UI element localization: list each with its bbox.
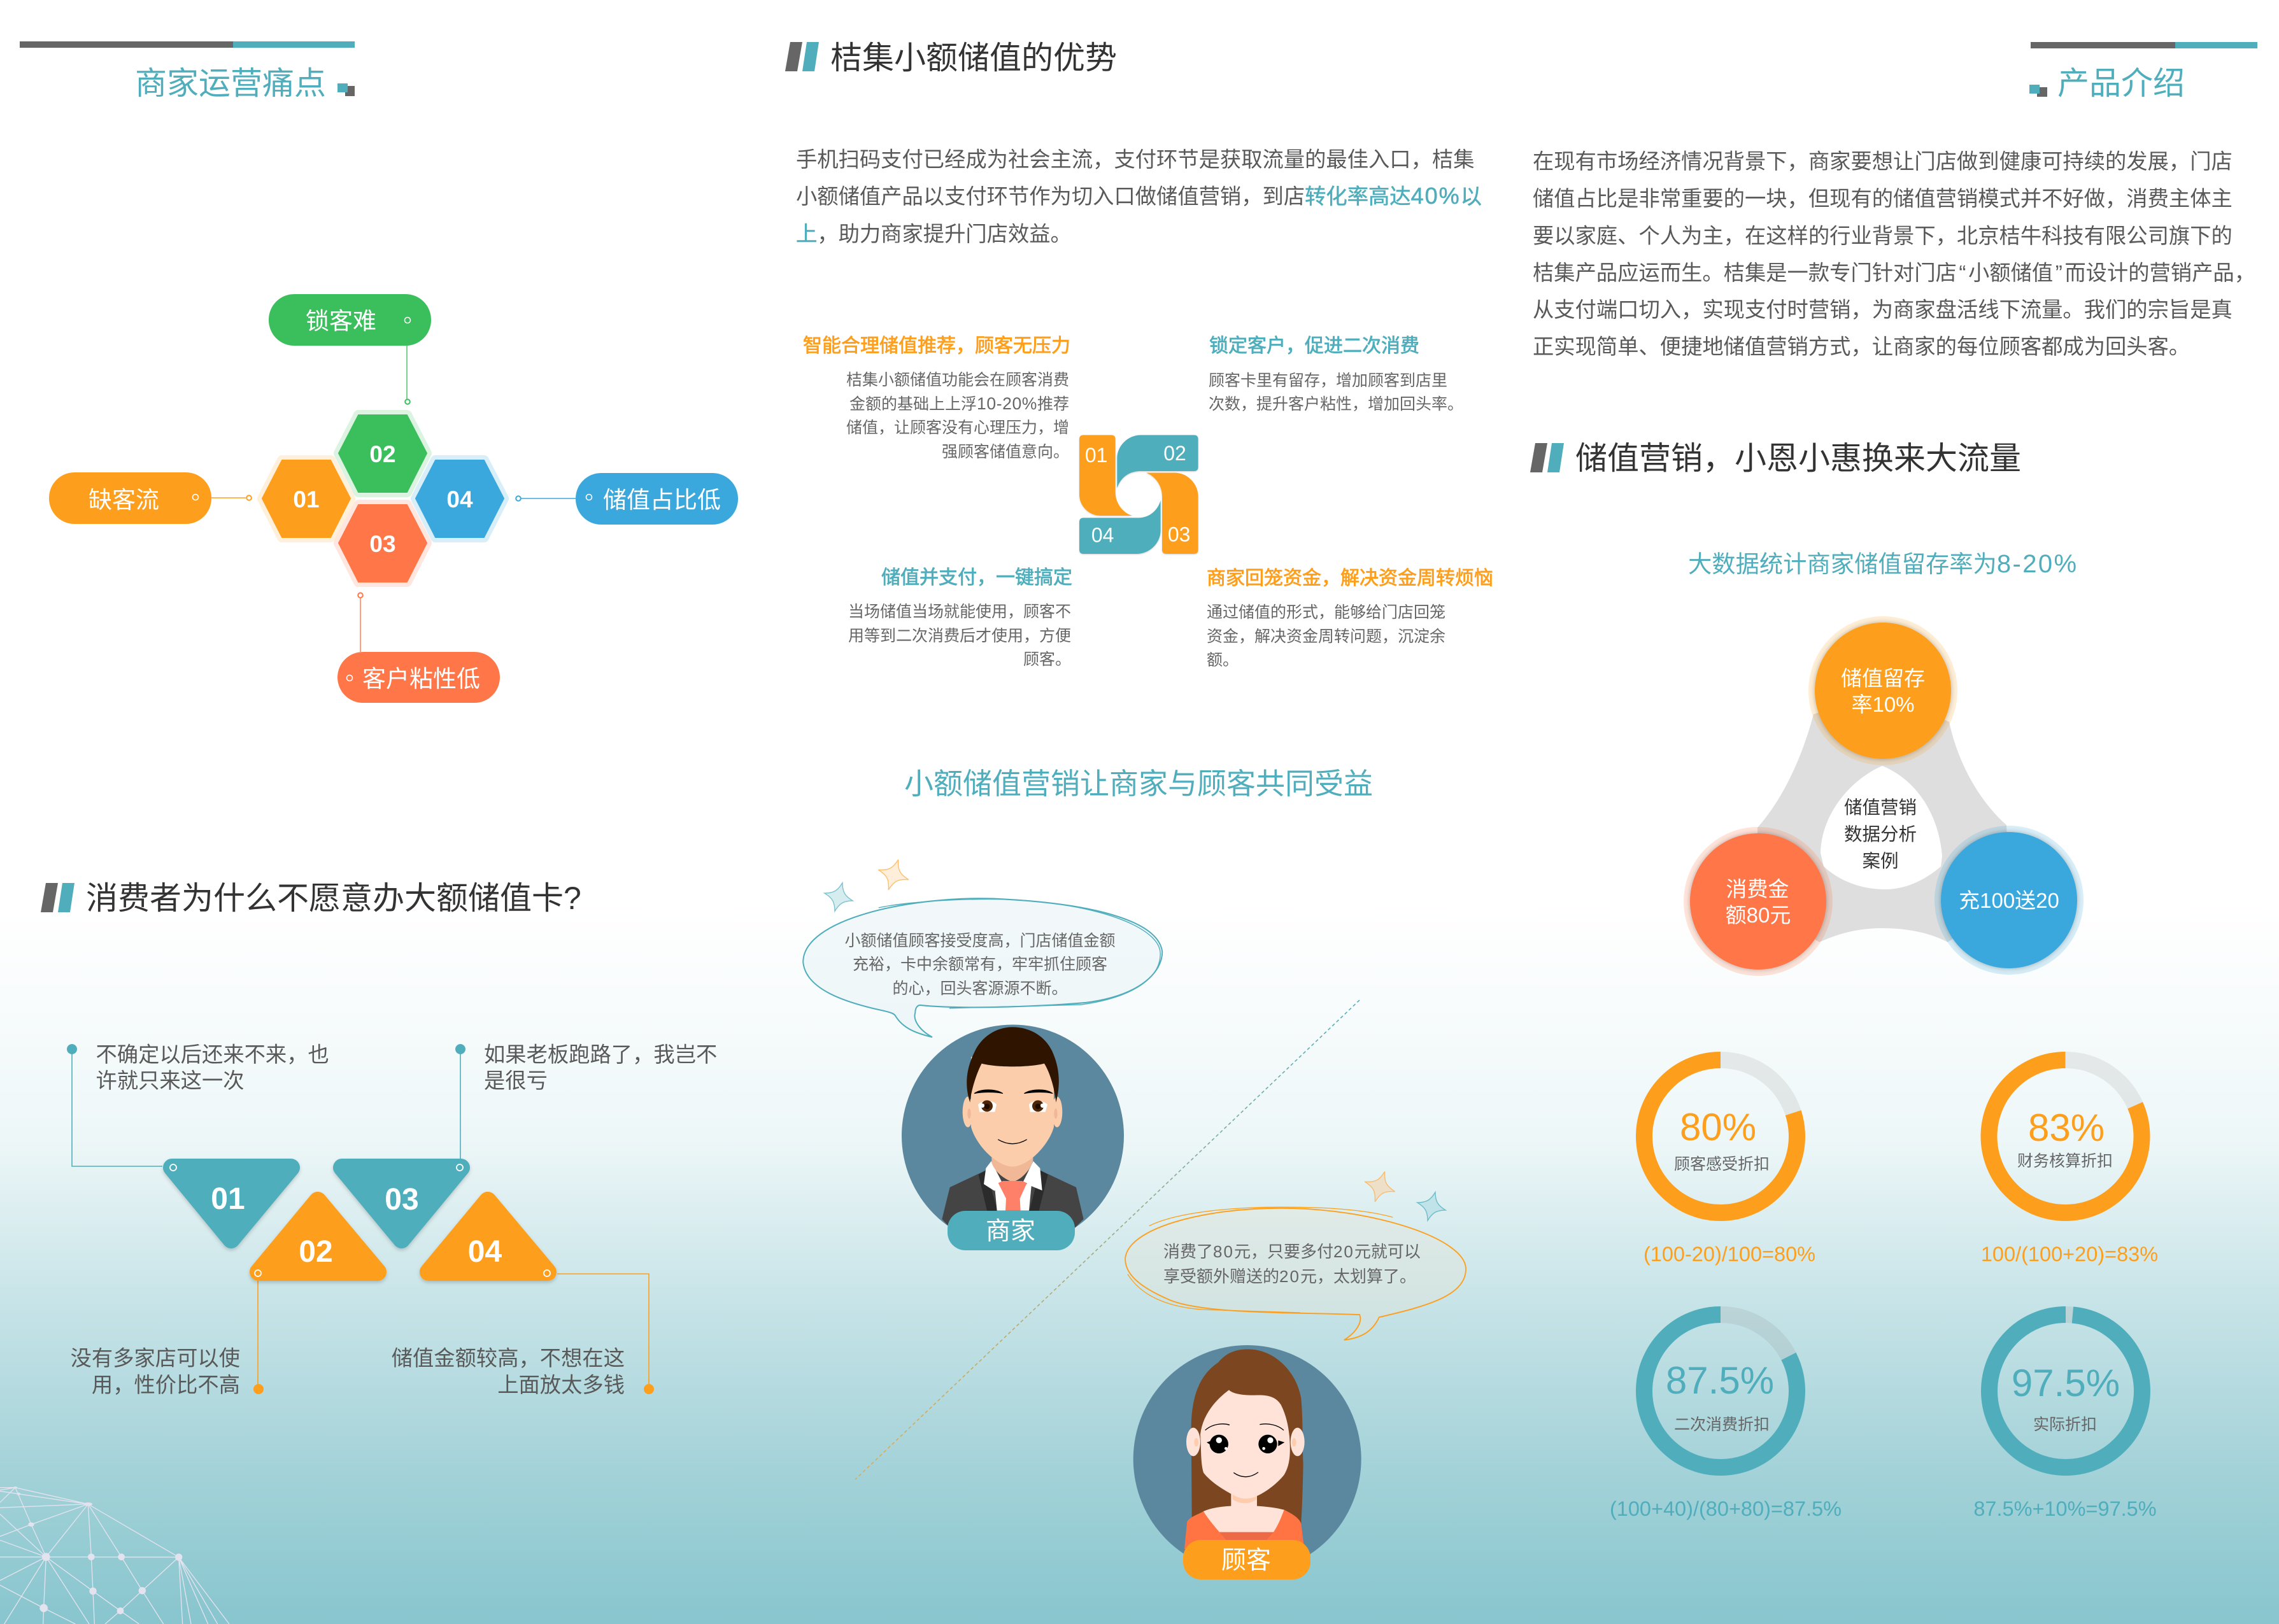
text: center (1844, 798, 1917, 872)
feature 04: pay at once: 当场储值当场就能使用，顾客不 (848, 603, 1071, 621)
formula: 87.5%: (100+40)/(80+80)=87.5% (1610, 1497, 1842, 1520)
star: teal top (821, 879, 856, 915)
donut: 87.5%: 87.5% (1666, 1359, 1774, 1402)
heading: why consumers refuse: 消费者为什么不愿意办大额储值卡? (86, 880, 581, 916)
feature 01: smart recommendation: 储值，让顾客没有心理压力，增 (846, 419, 1069, 437)
triangle 01: 01 (211, 1182, 245, 1216)
formula: 83%: 100/(100+20)=83% (1981, 1243, 2158, 1266)
hexagon 03 (339, 505, 427, 582)
speech bubble: merchant: 充裕，卡中余额常有，牢牢抓住顾客 (853, 956, 1107, 973)
text: center: 案例 (1862, 851, 1899, 872)
text: advantages intro: 手机扫码支付已经成为社会主流，支付环节是获取流量的最佳入口，桔集 (796, 148, 1475, 172)
connector: low stickiness (358, 593, 363, 652)
feature 02: lock customers: 次数，提升客户粘性，增加回头率。 (1209, 395, 1463, 413)
text: product introduction (1533, 150, 2255, 359)
feature 01: smart recommendation: 金额的基础上上浮10-20%推荐 (849, 394, 1069, 413)
hexagon 04: 04 (446, 486, 473, 512)
heading: shared benefit: 小额储值营销让商家与顾客共同受益 (904, 767, 1373, 800)
panel: merchant pain points (20, 41, 738, 703)
pill: 缺客流 (49, 472, 211, 524)
text: reason 01: 许就只来这一次 (96, 1070, 245, 1093)
text: reason 01 (96, 1043, 329, 1093)
feature 01: smart recommendation: 智能合理储值推荐，顾客无压力 (803, 335, 1070, 357)
feature 02: lock customers: 锁定客户，促进二次消费 (1209, 335, 1419, 357)
feature 02: lock customers (1209, 335, 1463, 413)
text: reason 02: 用，性价比不高 (92, 1374, 240, 1397)
text: center: 储值营销 (1844, 798, 1917, 818)
speech bubble: merchant: 小额储值顾客接受度高，门店储值金额 (844, 932, 1116, 950)
connector: lock customers (405, 346, 410, 404)
donut: 97.5%: 实际折扣 (2033, 1416, 2097, 1434)
hexagon 02: 02 (369, 441, 396, 467)
icon: slanted title bars (785, 42, 819, 71)
panel: product introduction (1533, 42, 2257, 359)
text: left circle (1726, 877, 1791, 927)
connector: reason 02 (253, 1276, 264, 1394)
connector: reason 03 (455, 1044, 465, 1159)
star: orange top (873, 854, 914, 895)
label pill: merchant (948, 1211, 1075, 1250)
text: right circle: 充100送20 (1959, 889, 2059, 912)
text: product introduction: 在现有市场经济情况背景下，商家要想让门店做到健康可持续的发展，门店 (1533, 150, 2233, 174)
donut: 87.5% (1644, 1315, 1797, 1467)
diagram: three circle case (1684, 616, 2084, 976)
donut: 83% (1989, 1060, 2142, 1213)
label pill: customer (1183, 1540, 1310, 1579)
formula: 80%: (100-20)/100=80% (1644, 1243, 1815, 1266)
heading bar: product (2031, 42, 2257, 48)
donut: 87.5%: 二次消费折扣 (1674, 1416, 1770, 1434)
label pill: customer: 顾客 (1221, 1547, 1271, 1574)
speech bubble: merchant (803, 898, 1162, 1037)
text: reason 03 (484, 1043, 717, 1093)
character: customer (1133, 1345, 1361, 1573)
diagonal dashed divider (855, 1000, 1360, 1479)
heading: product introduction: 产品介绍 (2057, 66, 2185, 101)
character: merchant (902, 1025, 1124, 1246)
donut: 83%: 财务核算折扣 (2017, 1152, 2113, 1170)
subheading: retention rate: 大数据统计商家储值留存率为8-20% (1688, 550, 2078, 578)
heading: advantages: 桔集小额储值的优势 (830, 40, 1117, 76)
panel: advantages (785, 40, 1493, 669)
feature 03: recoup funds (1207, 568, 1493, 669)
pill: 锁客难: 锁客难 (306, 308, 376, 334)
connector: stored value ratio (516, 496, 576, 501)
text: left circle: 消费金 (1726, 877, 1789, 901)
hexagon 04 (416, 460, 504, 537)
text: top circle (1841, 667, 1925, 716)
panel: stored value marketing (1530, 441, 2158, 1520)
pill: 客户粘性低 (337, 652, 500, 703)
feature 04: pay at once: 顾客。 (1023, 651, 1071, 668)
feature 01: smart recommendation: 桔集小额储值功能会在顾客消费 (846, 371, 1069, 389)
hexagon 03: 03 (369, 531, 396, 557)
donut: 83%: 83% (2028, 1106, 2105, 1149)
icon: slanted title bars (1530, 443, 1564, 472)
heading bar: pain points (20, 41, 355, 48)
text: reason 02: 没有多家店可以使 (71, 1347, 240, 1371)
feature 03: recoup funds: 通过储值的形式，能够给门店回笼 (1207, 604, 1445, 621)
donut: 80%: 顾客感受折扣 (1674, 1155, 1770, 1173)
text: advantages intro: 上，助力商家提升门店效益。 (796, 223, 1072, 246)
pill: 缺客流: 缺客流 (89, 487, 159, 513)
feature 04: pay at once: 用等到二次消费后才使用，方便 (848, 627, 1071, 645)
triangle 04: 04 (468, 1235, 502, 1269)
triangle 03: 03 (385, 1183, 419, 1217)
hexagon 01 (262, 460, 350, 537)
feature 02: lock customers: 顾客卡里有留存，增加顾客到店里 (1209, 372, 1447, 390)
hexagon 01: 01 (293, 486, 320, 512)
feature 04: pay at once (848, 567, 1072, 668)
text: top circle: 储值留存 (1841, 667, 1925, 690)
icon: slanted title bars (41, 883, 75, 912)
icon: heading squares right (2029, 85, 2047, 97)
pinwheel diagram: 03 (1168, 523, 1190, 546)
pinwheel diagram (1079, 435, 1198, 554)
pinwheel diagram: 01 (1085, 444, 1107, 467)
text: reason 02 (71, 1347, 240, 1397)
star: orange lower (1360, 1166, 1400, 1207)
label pill: merchant: 商家 (986, 1218, 1035, 1245)
heading: stored value marketing: 储值营销，小恩小惠换来大流量 (1575, 441, 2021, 476)
donut: 97.5%: 97.5% (2012, 1362, 2120, 1404)
triangle 02: 02 (299, 1235, 333, 1269)
triangle 01 (170, 1164, 291, 1239)
donut: 80% (1644, 1060, 1797, 1213)
text: left circle: 额80元 (1726, 903, 1791, 927)
speech bubble: merchant: 的心，回头客源源不断。 (892, 980, 1068, 998)
feature 04: pay at once: 储值并支付，一键搞定 (881, 567, 1072, 588)
connector: reason 04 (557, 1274, 654, 1394)
pill: 储值占比低 (576, 473, 738, 525)
text: top circle: 率10% (1851, 693, 1915, 716)
donut: 97.5% (1989, 1315, 2142, 1467)
decorative mesh network bottom left (0, 1486, 229, 1624)
text: product introduction: 要以家庭、个人为主，在这样的行业背景下，北京桔牛科技有限公司旗下的 (1533, 225, 2233, 248)
pill: 客户粘性低: 客户粘性低 (362, 666, 480, 692)
text: reason 03: 如果老板跑路了，我岂不 (484, 1043, 717, 1067)
pinwheel diagram: 04 (1091, 524, 1114, 547)
speech bubble: customer: 消费了80元，只要多付20元就可以 (1163, 1242, 1421, 1261)
feature 01: smart recommendation: 强顾客储值意向。 (942, 443, 1069, 461)
text: advantages intro (796, 148, 1482, 246)
pill: 储值占比低: 储值占比低 (603, 487, 721, 513)
pill: 锁客难 (269, 294, 431, 346)
donut: 80%: 80% (1680, 1106, 1756, 1148)
icon: heading squares left (337, 83, 355, 96)
feature 03: recoup funds: 资金，解决资金周转问题，沉淀余 (1207, 628, 1445, 646)
text: advantages intro: 小额储值产品以支付环节作为切入口做储值营销，到店转化率高达40%以 (796, 183, 1482, 209)
speech bubble: customer (1125, 1207, 1466, 1340)
hexagon 02 (339, 415, 427, 492)
text: product introduction: 从支付端口切入，实现支付时营销，为商家盘活线下流量。我们的宗旨是真 (1533, 299, 2233, 322)
text: product introduction: 桔集产品应运而生。桔集是一款专门针对门店“小额储值”而设计的营销产品， (1533, 262, 2255, 285)
heading: merchant pain points: 商家运营痛点 (135, 66, 326, 101)
triangle 03 (342, 1164, 463, 1239)
triangle 02 (255, 1201, 378, 1276)
text: product introduction: 储值占比是非常重要的一块，但现有的储值营销模式并不好做，消费主体主 (1533, 187, 2233, 211)
text: reason 04: 储值金额较高，不想在这 (392, 1347, 625, 1371)
panel: why consumers refuse large cards (41, 880, 717, 1397)
text: center: 数据分析 (1844, 824, 1917, 845)
connector: reason 01 (67, 1044, 162, 1166)
connector: lack of traffic (211, 495, 252, 500)
speech bubble: customer: 享受额外赠送的20元，太划算了。 (1163, 1267, 1416, 1286)
triangle 04 (429, 1201, 550, 1276)
text: product introduction: 正实现简单、便捷地储值营销方式，让商家的每位顾客都成为回头客。 (1533, 335, 2190, 359)
text: reason 04: 上面放太多钱 (497, 1374, 625, 1397)
formula: 97.5%: 87.5%+10%=97.5% (1973, 1497, 2157, 1520)
text: reason 01: 不确定以后还来不来，也 (96, 1043, 329, 1067)
text: reason 03: 是很亏 (484, 1070, 548, 1093)
feature 01: smart recommendation (803, 335, 1070, 461)
text: reason 04 (392, 1347, 625, 1397)
pinwheel diagram: 02 (1163, 442, 1186, 465)
star: teal lower (1414, 1189, 1449, 1224)
feature 03: recoup funds: 额。 (1207, 651, 1239, 669)
feature 03: recoup funds: 商家回笼资金，解决资金周转烦恼 (1207, 568, 1493, 589)
